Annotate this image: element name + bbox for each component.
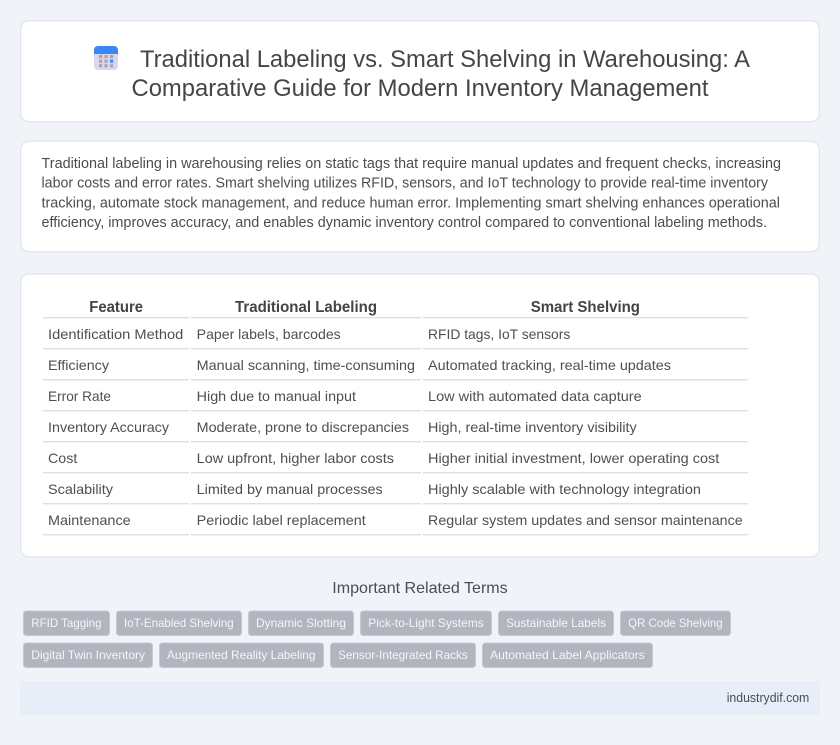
row: scalability: Scalability (48, 481, 113, 497)
table header row: Feature (89, 299, 143, 316)
title: Traditional Labeling vs. Smart Shelving in Warehousing: A (140, 46, 751, 73)
footer source text: industrydif.com (727, 690, 809, 705)
tag: Sensor-Integrated Racks: Sensor-Integrated Racks (338, 648, 468, 662)
row: efficiency (48, 357, 671, 373)
tag: Digital Twin Inventory (24, 643, 152, 668)
row: cost (48, 450, 719, 466)
tag: Augmented Reality Labeling (160, 643, 324, 668)
row: identification method: Identification Method (48, 326, 183, 342)
panel: title header (21, 21, 819, 122)
tag: Automated Label Applicators (482, 643, 652, 668)
tag: QR Code Shelving (620, 611, 730, 636)
table rules (43, 317, 748, 535)
tag: Automated Label Applicators: Automated Label Applicators (490, 648, 645, 662)
row: maintenance (48, 512, 743, 528)
tag: Sustainable Labels (498, 611, 614, 636)
tag: QR Code Shelving: QR Code Shelving (628, 616, 723, 630)
tag: Dynamic Slotting: Dynamic Slotting (256, 616, 346, 630)
intro text (42, 156, 781, 231)
row: scalability (48, 481, 701, 497)
tag: Pick-to-Light Systems: Pick-to-Light Systems (368, 616, 484, 630)
row: identification method: Paper labels, barcodes (197, 326, 341, 342)
tag: Digital Twin Inventory: Digital Twin Inventory (31, 648, 145, 662)
tag: RFID Tagging (24, 611, 110, 636)
heading: important related terms: Important Related Terms (332, 580, 508, 597)
row: error rate: Low with automated data capture (428, 388, 642, 404)
icon: calendar grid (94, 46, 118, 70)
row: efficiency: Efficiency (48, 357, 109, 373)
title (132, 46, 751, 102)
row: cost: Cost (48, 450, 77, 466)
row: error rate: Error Rate (48, 388, 111, 404)
panel: comparison table (21, 274, 819, 557)
footer band (20, 681, 820, 714)
row: cost: Higher initial investment, lower operating cost (428, 450, 719, 466)
row: identification method (48, 326, 570, 342)
tag: Sustainable Labels: Sustainable Labels (506, 616, 606, 630)
tag: Sensor-Integrated Racks (330, 643, 476, 668)
row: identification method: RFID tags, IoT sensors (428, 326, 570, 342)
intro text: efficiency, improves accuracy, and enables dynamic inventory control compared to conventional labeling methods. (42, 215, 767, 231)
row: scalability: Limited by manual processes (197, 481, 383, 497)
intro text: Traditional labeling in warehousing relies on static tags that require manual updates and frequent checks, increasing (42, 156, 781, 172)
row: cost: Low upfront, higher labor costs (197, 450, 394, 466)
tag: Dynamic Slotting (248, 611, 354, 636)
row: scalability: Highly scalable with technology integration (428, 481, 701, 497)
table header row: Traditional Labeling (235, 299, 377, 316)
intro text: labor costs and error rates. Smart shelving utilizes RFID, sensors, and IoT technology to provide real-time inventory (42, 176, 769, 192)
row: error rate (48, 388, 642, 404)
row: inventory accuracy: Moderate, prone to discrepancies (197, 419, 409, 435)
row: inventory accuracy: High, real-time inventory visibility (428, 419, 637, 435)
row: inventory accuracy: Inventory Accuracy (48, 419, 169, 435)
row: efficiency: Automated tracking, real-time updates (428, 357, 671, 373)
table header row: Smart Shelving (531, 299, 640, 316)
table header row (89, 299, 640, 316)
tag: Augmented Reality Labeling: Augmented Reality Labeling (167, 648, 316, 662)
title: Comparative Guide for Modern Inventory Management (132, 75, 709, 102)
intro text: tracking, automate stock management, and reduce human error. Implementing smart shelving enhances operational (42, 196, 780, 212)
tag: RFID Tagging: RFID Tagging (31, 616, 101, 630)
related term tags (24, 611, 730, 668)
tag: IoT-Enabled Shelving (116, 611, 242, 636)
row: efficiency: Manual scanning, time-consuming (197, 357, 415, 373)
row: inventory accuracy (48, 419, 637, 435)
row: maintenance: Periodic label replacement (197, 512, 366, 528)
row: error rate: High due to manual input (197, 388, 356, 404)
panel: intro paragraph (21, 141, 819, 252)
row: maintenance: Regular system updates and sensor maintenance (428, 512, 743, 528)
row: maintenance: Maintenance (48, 512, 131, 528)
tag: Pick-to-Light Systems (360, 611, 492, 636)
tag: IoT-Enabled Shelving: IoT-Enabled Shelving (124, 616, 234, 630)
